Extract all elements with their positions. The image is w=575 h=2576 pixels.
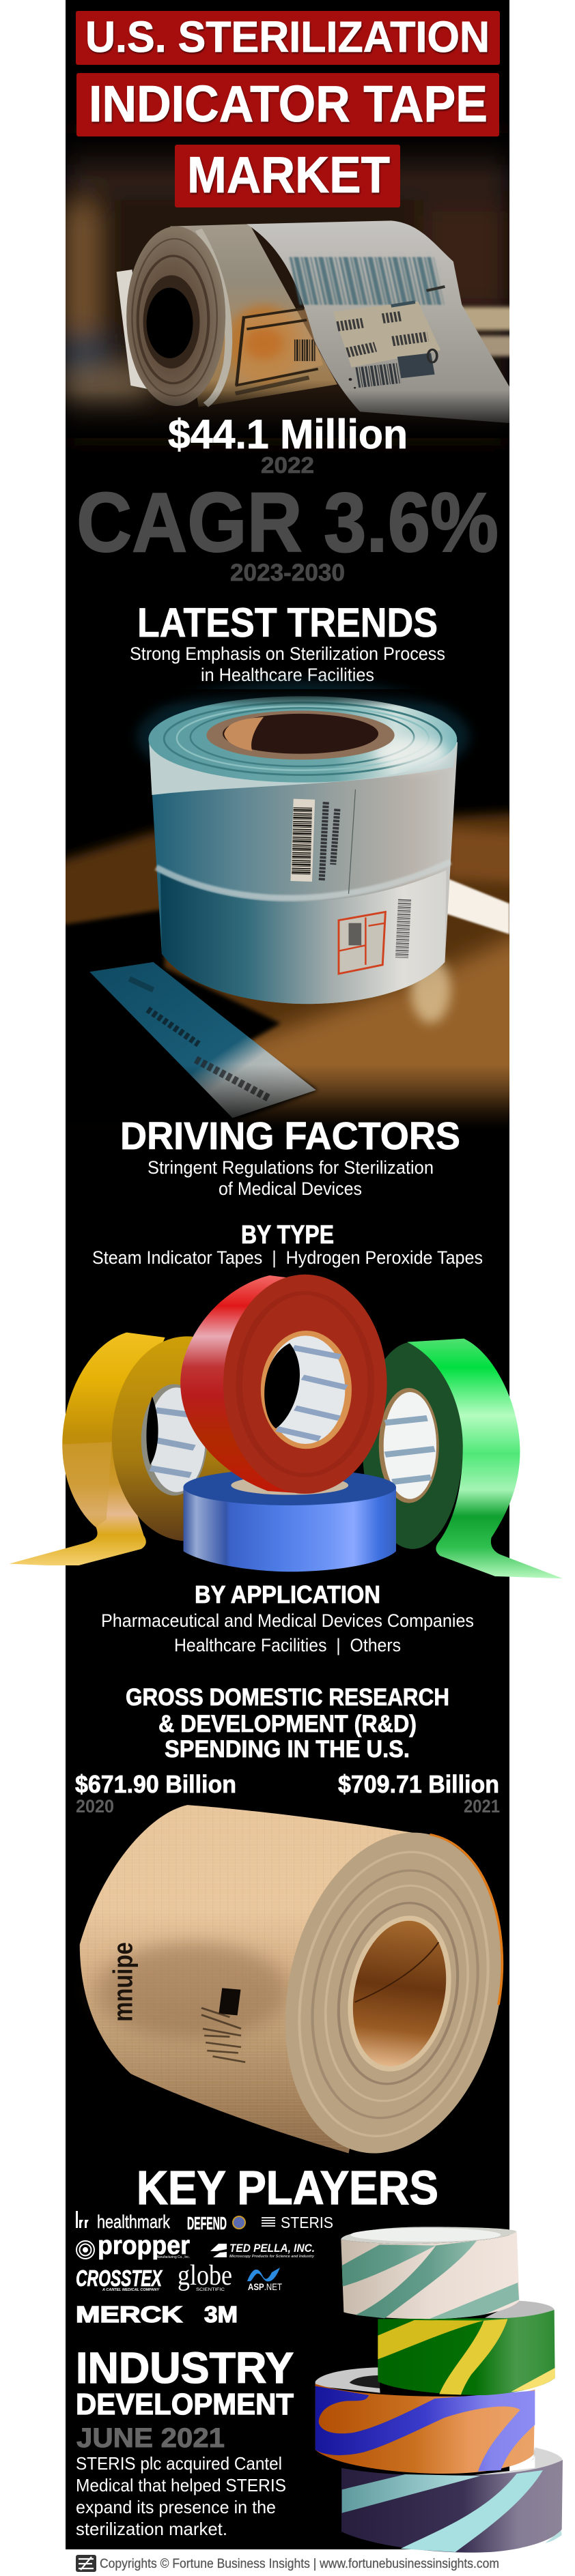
development description: expand its presence in the [76, 2497, 276, 2517]
2020 spending value: $671.90 Billion [75, 1770, 236, 1798]
green tape [363, 1339, 563, 1578]
driving factors text [148, 1157, 434, 1199]
heading: industry development: DEVELOPMENT [76, 2388, 294, 2421]
market size value: $44.1 Million [168, 411, 408, 457]
hero photo: tape roll with barcode label [61, 133, 519, 438]
latest trends text: Strong Emphasis on Sterilization Process [130, 643, 445, 664]
heading: by type: BY TYPE [241, 1221, 334, 1249]
heading: R&D spending [126, 1684, 449, 1763]
logo: Crosstex [76, 2266, 163, 2292]
logo: healthmark: healthmark [97, 2212, 170, 2232]
heading: latest trends: LATEST TRENDS [137, 600, 438, 646]
logo: 3M: 3M [204, 2302, 238, 2327]
driving factors text: Stringent Regulations for Sterilization [148, 1157, 434, 1178]
logo: Ted Pella [210, 2242, 315, 2259]
logo: Crosstex: CROSSTEX [76, 2266, 163, 2291]
illustration: kraft paper tape roll [80, 1805, 527, 2165]
latest trends text: in Healthcare Facilities [201, 665, 374, 685]
title line 2: INDICATOR TAPE [89, 75, 488, 132]
green tape [378, 2301, 555, 2395]
heading: R&D spending: GROSS DOMESTIC RESEARCH [126, 1684, 449, 1711]
driving factors text: of Medical Devices [219, 1178, 362, 1199]
development description: sterilization market. [76, 2519, 227, 2539]
logo: Defend: DEFEND [187, 2213, 227, 2233]
development description: STERIS plc acquired Cantel [76, 2453, 282, 2474]
heading: by application: BY APPLICATION [195, 1580, 380, 1608]
heading: driving factors: DRIVING FACTORS [120, 1114, 460, 1158]
CAGR figure: CAGR 3.6% [76, 476, 499, 570]
title line 1: U.S. STERILIZATION [85, 12, 490, 61]
logo: Propper: propper [98, 2231, 190, 2260]
illustration: four coloured tape rolls [9, 1275, 563, 1578]
year 2021: 2021 [464, 1796, 500, 1817]
by application text: Pharmaceutical and Medical Devices Companies [101, 1610, 474, 1631]
logos: key players [76, 2211, 333, 2327]
latest trends text [130, 643, 445, 685]
heading: key players: KEY PLAYERS [137, 2161, 438, 2214]
logo: Globe Scientific: globe [178, 2260, 232, 2291]
heading: industry development: INDUSTRY [76, 2343, 294, 2392]
photo: blue sterilization tape roll [66, 673, 509, 1123]
development description [76, 2453, 286, 2539]
logo: healthmark [76, 2211, 170, 2232]
yellow tape [9, 1333, 262, 1565]
black background panel [66, 0, 509, 2549]
logo: Steris: STERIS [281, 2214, 333, 2231]
by application text [101, 1610, 474, 1655]
logo: Globe Scientific: SCIENTIFIC [196, 2287, 225, 2292]
market size year: 2022 [261, 452, 314, 478]
blue tape [183, 1469, 396, 1572]
title [76, 11, 500, 207]
2021 spending value: $709.71 Billion [338, 1770, 499, 1798]
footer copyright: Copyrights © Fortune Business Insights | www.fortunebusinessinsights.com [100, 2557, 499, 2571]
logo: Merck: MERCK [76, 2302, 182, 2327]
orange tape [315, 2367, 535, 2474]
logo: ASP.NET: ASP.NET [248, 2281, 282, 2292]
illustration: kraft paper tape roll: mnuipe [107, 1942, 138, 2022]
cream tape [341, 2227, 520, 2319]
logo: Crosstex: A CANTEL MEDICAL COMPANY [102, 2288, 160, 2292]
purple tape [341, 2448, 563, 2553]
heading: R&D spending: & DEVELOPMENT (R&D) [158, 1711, 417, 1737]
heading: industry development [76, 2343, 294, 2421]
logo: ASP.NET [247, 2268, 282, 2292]
illustration: stack of patterned tapes [315, 2227, 563, 2553]
footer logo [76, 2555, 96, 2572]
logo: Propper: Manufacturing Co., Inc. [156, 2255, 190, 2259]
by application text: Healthcare Facilities | Others [174, 1635, 401, 1655]
by type text: Steam Indicator Tapes | Hydrogen Peroxide Tapes [92, 1247, 483, 1268]
CAGR period: 2023-2030 [230, 560, 345, 586]
logo: Ted Pella: Microscopy Products for Science and Industry [229, 2255, 315, 2259]
year 2020: 2020 [76, 1796, 114, 1817]
development description: Medical that helped STERIS [76, 2475, 286, 2495]
logo: Steris [262, 2214, 333, 2231]
title line 3: MARKET [187, 146, 390, 203]
heading: R&D spending: SPENDING IN THE U.S. [165, 1736, 410, 1763]
logo: Ted Pella: TED PELLA, INC. [229, 2242, 315, 2255]
red tape [180, 1275, 387, 1494]
development date: JUNE 2021 [76, 2423, 225, 2453]
